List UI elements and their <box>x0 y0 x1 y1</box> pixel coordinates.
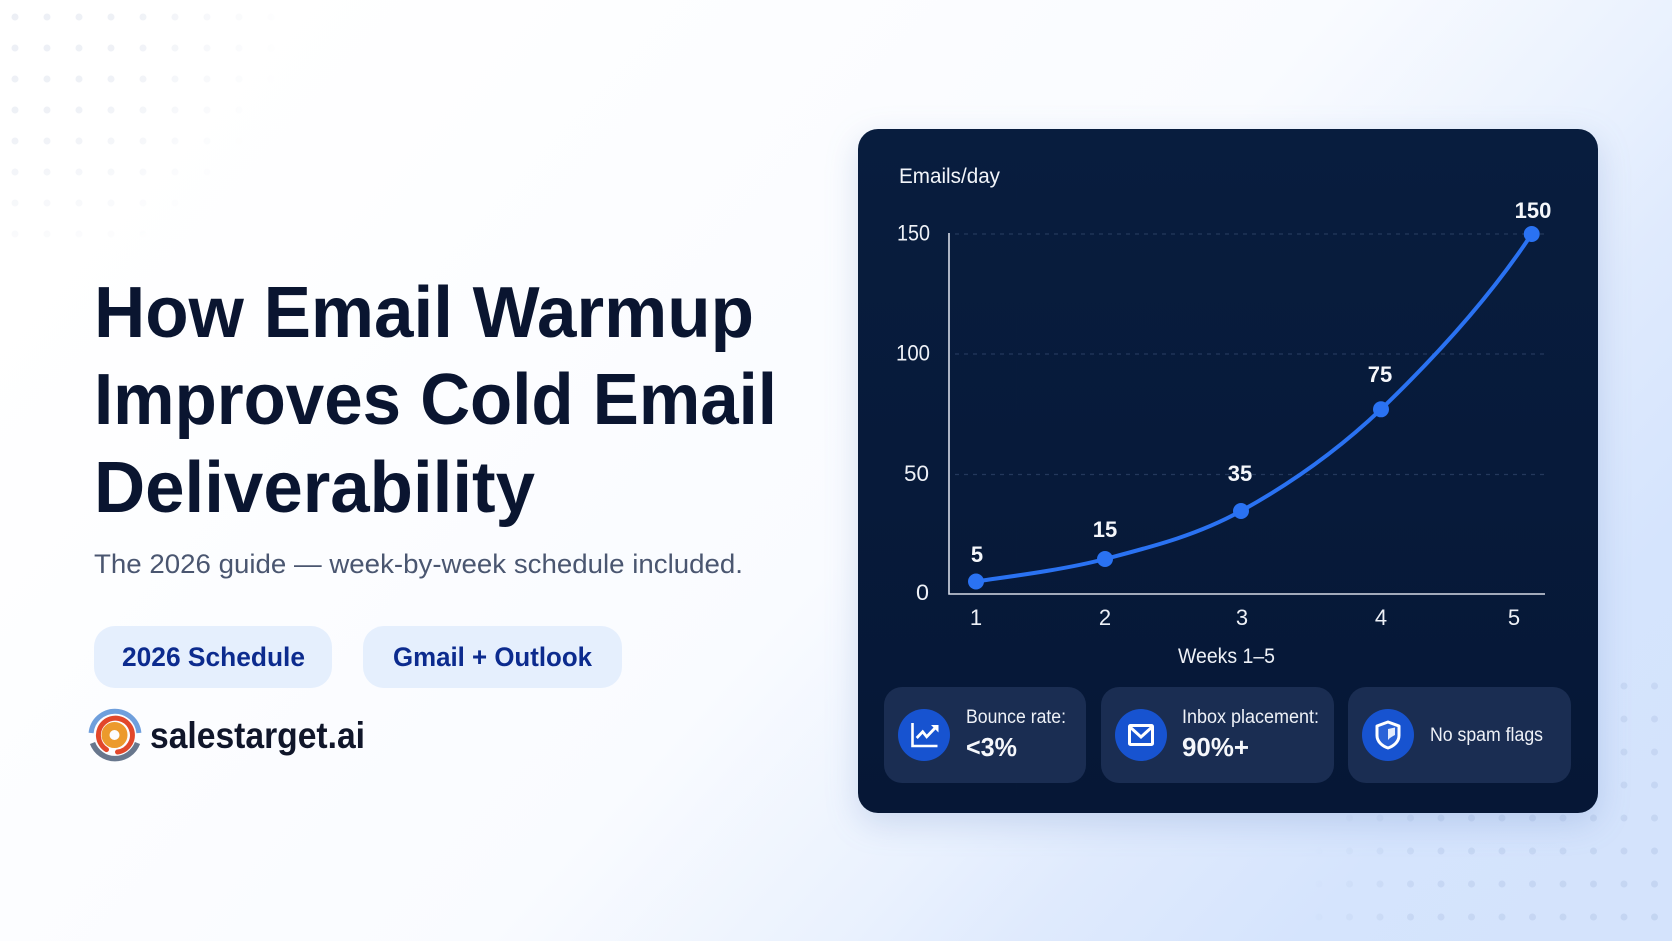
title <box>94 273 777 528</box>
x-axis labels: 2 <box>1099 605 1111 630</box>
x-axis labels: 5 <box>1508 605 1520 630</box>
stat card: no spam flags <box>1348 687 1571 783</box>
icon: envelope <box>1115 709 1167 761</box>
panel: chart card <box>858 129 1598 813</box>
stat card: inbox placement: 90%+ <box>1182 732 1249 762</box>
x-axis labels <box>970 605 1520 630</box>
y-axis labels <box>896 220 930 605</box>
data labels: 150 <box>1515 198 1551 223</box>
title: Deliverability <box>94 448 535 528</box>
subtitle: The 2026 guide — week-by-week schedule included. <box>94 549 743 579</box>
title: Improves Cold Email <box>94 360 777 440</box>
stat card: inbox placement: Inbox placement: <box>1182 707 1319 728</box>
data labels: 5 <box>971 542 983 567</box>
logo: salestarget.ai: salestarget.ai <box>150 715 365 756</box>
data labels: 35 <box>1228 461 1252 486</box>
line chart <box>896 198 1551 630</box>
stat card: bounce rate: Bounce rate: <box>966 707 1066 728</box>
data labels: 15 <box>1093 517 1117 542</box>
axis title: Weeks 1–5: Weeks 1–5 <box>1178 645 1275 668</box>
tag: 2026 Schedule <box>94 626 332 688</box>
logo: salestarget.ai <box>91 711 365 759</box>
x-axis labels: 3 <box>1236 605 1248 630</box>
stat card: inbox placement <box>1101 687 1334 783</box>
stat card: bounce rate: <3% <box>966 732 1017 762</box>
data labels <box>971 198 1551 567</box>
y-axis labels: 0 <box>916 580 929 605</box>
y-axis labels: 50 <box>904 461 929 486</box>
title: How Email Warmup <box>94 273 754 353</box>
data points <box>968 226 1540 590</box>
icon: shield <box>1362 709 1414 761</box>
data labels: 75 <box>1368 362 1392 387</box>
tag: Gmail + Outlook: Gmail + Outlook <box>393 642 593 672</box>
y-axis labels: 150 <box>897 220 930 246</box>
icon: trend chart <box>898 709 950 761</box>
stat card: no spam flags: No spam flags <box>1430 725 1543 746</box>
y-axis labels: 100 <box>896 340 930 366</box>
icon: target logo <box>91 711 139 759</box>
stat card: bounce rate <box>884 687 1086 783</box>
x-axis labels: 1 <box>970 605 982 630</box>
tag: Gmail + Outlook <box>363 626 622 688</box>
axis title: Emails/day: Emails/day <box>899 165 1000 188</box>
growth curve <box>976 234 1532 582</box>
tag: 2026 Schedule: 2026 Schedule <box>122 642 305 672</box>
x-axis labels: 4 <box>1375 605 1387 630</box>
